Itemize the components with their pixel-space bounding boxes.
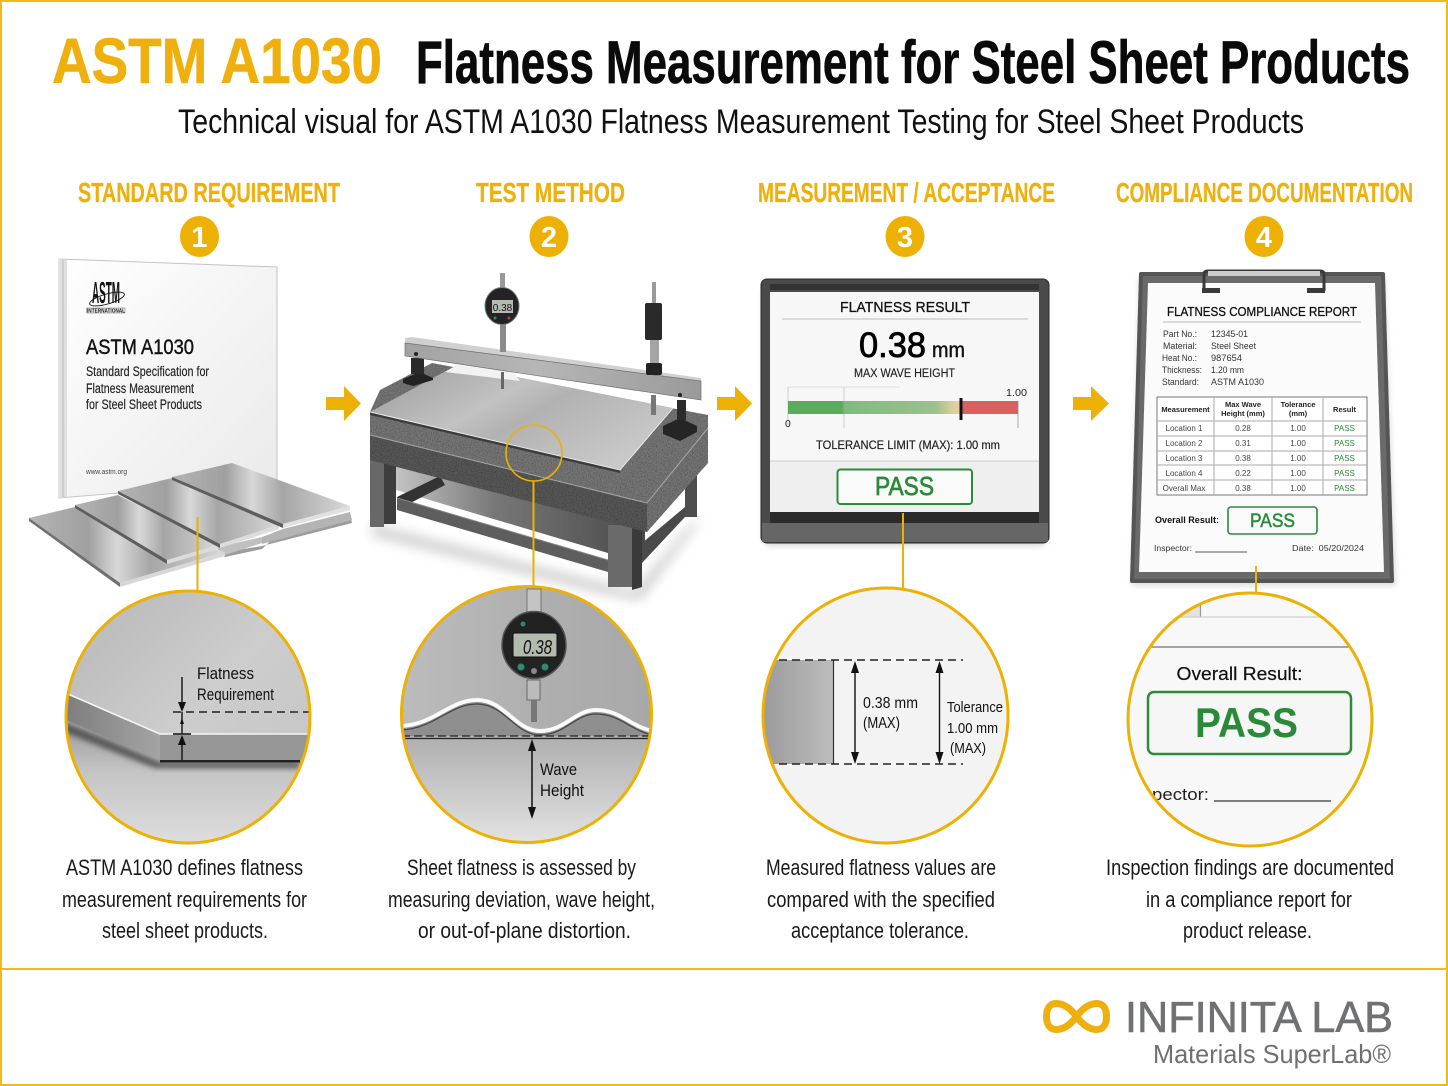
flatness result monitor: TOLERANCE LIMIT (MAX): 1.00 mm [816, 438, 1000, 452]
sheet 3 [118, 478, 279, 544]
step badge 4 [1244, 216, 1284, 257]
report table: 1.00 [1290, 454, 1306, 463]
detail circle 4: overall result [1120, 590, 1380, 850]
lower sheets [220, 514, 352, 557]
caption: step 3: acceptance tolerance. [791, 918, 969, 943]
report table: Height (mm) [1221, 409, 1265, 418]
caption: step 1 [62, 855, 307, 943]
dimension arrows [173, 677, 191, 760]
large pass stamp: PASS [1195, 699, 1298, 746]
compliance report clipboard: Date: 05/20/2024 [1292, 543, 1364, 553]
report table: Overall Max [1163, 484, 1205, 493]
arrow: step 1 to step 2 [326, 386, 361, 421]
report fields: Thickness: [1162, 365, 1202, 375]
tolerance gauge bar: 0 [785, 418, 791, 430]
sheet 4 [172, 463, 350, 524]
caption: step 4: product release. [1183, 918, 1312, 943]
report fields: 12345-01 [1211, 329, 1248, 339]
leader line: report to detail [1255, 566, 1257, 594]
detail circle 3: tolerance comparison: 0.38 mm [863, 695, 918, 712]
detail circle 2: wave height: Wave [540, 760, 577, 779]
report table: Max Wave [1225, 400, 1261, 409]
dashed reference line [173, 711, 310, 713]
right foot [663, 400, 697, 441]
caption: step 1: steel sheet products. [102, 918, 268, 943]
arrow: step 2 to step 3 [717, 386, 752, 421]
report table: Measurement [1161, 405, 1210, 414]
compliance report clipboard: Overall Result: [1155, 515, 1219, 526]
report fields: Part No.: [1163, 329, 1197, 339]
report fields: ASTM A1030 [1211, 377, 1264, 387]
report table: 1.00 [1290, 469, 1306, 478]
heading: test method: TEST METHOD [476, 177, 625, 208]
report table: 0.38 [1235, 484, 1251, 493]
standard document book: Standard Specification for [86, 364, 209, 379]
caption: step 3: Measured flatness values are [766, 855, 996, 880]
flatness result monitor [761, 279, 1049, 546]
standard document book [59, 259, 277, 498]
digital gauge [485, 273, 519, 389]
standard document book: ASTM A1030 [86, 336, 194, 359]
compliance report clipboard: FLATNESS COMPLIANCE REPORT [1167, 305, 1357, 319]
step badge 4: 4 [1256, 222, 1272, 254]
footer divider [0, 968, 1448, 970]
report table: PASS [1334, 439, 1355, 448]
caption: step 4 [1106, 855, 1394, 943]
tolerance gauge bar [785, 387, 1027, 430]
step badge 1: 1 [191, 222, 208, 254]
icon: infinity mark [1046, 1004, 1106, 1030]
caption: step 2 [388, 855, 655, 943]
sheet 1 [29, 507, 225, 583]
caption: step 2: measuring deviation, wave height, [388, 887, 655, 912]
report table: Result [1333, 405, 1356, 414]
caption: step 1: ASTM A1030 defines flatness [66, 855, 303, 880]
measured value: MAX WAVE HEIGHT [854, 368, 955, 380]
left foot [403, 358, 433, 386]
tolerance gauge bar: 1.00 [1006, 387, 1027, 399]
granite surface plate test setup [370, 273, 708, 600]
caption: step 1: measurement requirements for [62, 887, 307, 912]
report table [1157, 397, 1367, 495]
standard document book: for Steel Sheet Products [86, 397, 202, 412]
detail circle 4: overall result: Overall Result: [1176, 663, 1302, 684]
detail circle 4: overall result: pector: [1152, 785, 1209, 804]
report table: Tolerance [1281, 400, 1315, 409]
step badge 3 [886, 216, 924, 257]
tolerance arrow [936, 661, 944, 764]
detail circle 1: flatness requirement [60, 585, 316, 850]
flatness result monitor: FLATNESS RESULT [840, 300, 970, 316]
measured value: 0.38 [859, 326, 926, 365]
report fields: Steel Sheet [1211, 341, 1256, 351]
detail circle 2: wave height [400, 585, 656, 845]
report table: 0.31 [1235, 439, 1251, 448]
detail circle 3: tolerance comparison: Tolerance [947, 699, 1003, 716]
footer logo: INFINITA LAB [1125, 993, 1393, 1042]
report fields: 1.20 mm [1211, 365, 1244, 375]
caption: step 3 [766, 855, 996, 943]
icon: ASTM logo [86, 277, 126, 314]
compliance report clipboard [1132, 271, 1396, 586]
report table: 1.00 [1290, 484, 1306, 493]
report fields: Standard: [1162, 377, 1199, 387]
detail circle 2: wave height: Height [540, 781, 584, 800]
report fields [1162, 329, 1264, 387]
step badge 3: 3 [897, 222, 913, 254]
caption: step 4: in a compliance report for [1146, 887, 1352, 912]
report table: PASS [1334, 424, 1355, 433]
report table: Location 4 [1166, 469, 1203, 478]
caption: step 4: Inspection findings are documented [1106, 855, 1394, 880]
compliance report clipboard: Inspector: [1154, 543, 1192, 553]
highlight ring on plate [506, 425, 562, 481]
heading: measurement / acceptance: MEASUREMENT / ACCEPTANCE [758, 177, 1055, 208]
title: ASTM A1030 [52, 25, 382, 97]
report table: 1.00 [1290, 439, 1306, 448]
heading: standard requirement: STANDARD REQUIREMENT [78, 177, 340, 208]
leader line: plate to detail [532, 481, 534, 590]
report fields: Material: [1163, 341, 1197, 351]
measured arrow [851, 661, 859, 764]
arrow: step 3 to step 4 [1073, 386, 1109, 421]
report table: PASS [1334, 469, 1355, 478]
report table: 0.28 [1235, 424, 1251, 433]
right gauge [645, 282, 662, 415]
detail circle 1: flatness requirement: Flatness [197, 665, 254, 683]
leader line: sheet to detail [196, 517, 198, 592]
large pass stamp [1148, 692, 1351, 754]
icon: ASTM logo: INTERNATIONAL [87, 308, 125, 314]
report table: Location 3 [1166, 454, 1203, 463]
wave height arrow [528, 739, 536, 819]
report table: Location 1 [1166, 424, 1203, 433]
granite plate [370, 363, 708, 503]
leader line: monitor to detail [902, 513, 904, 590]
detail circle 1: flatness requirement: Requirement [197, 686, 274, 704]
footer logo [1046, 993, 1393, 1069]
report table: Location 2 [1166, 439, 1203, 448]
sheet 2 [75, 495, 218, 560]
standard document book: www.astm.org [85, 467, 127, 476]
steel sheet samples [29, 463, 352, 587]
step badge 2: 2 [541, 222, 557, 254]
pass stamp [838, 470, 972, 504]
title [52, 25, 1410, 97]
metal clip [1202, 271, 1325, 293]
footer logo: Materials SuperLab® [1153, 1039, 1391, 1069]
report fields: 987654 [1211, 353, 1242, 363]
step badge 2 [530, 216, 568, 257]
measured value [854, 326, 965, 380]
report table: 0.22 [1235, 469, 1251, 478]
dial indicator [502, 589, 566, 722]
caption: step 3: compared with the specified [767, 887, 995, 912]
straightedge bar [405, 337, 701, 400]
caption: step 2: or out-of-plane distortion. [418, 918, 631, 943]
report pass stamp [1228, 507, 1317, 534]
report fields: Heat No.: [1162, 353, 1197, 363]
table stand [370, 458, 697, 590]
detail circle 3: tolerance comparison: (MAX) [950, 740, 986, 757]
caption: step 2: Sheet flatness is assessed by [407, 855, 636, 880]
detail circle 3: tolerance comparison [760, 585, 1012, 847]
report table: 1.00 [1290, 424, 1306, 433]
pass stamp: PASS [875, 471, 934, 501]
step badge 1 [180, 216, 219, 257]
icon: ASTM logo: ASTM [92, 277, 120, 311]
detail circle 3: tolerance comparison: (MAX) [863, 715, 900, 732]
digital gauge: 0.38 [493, 303, 513, 314]
detail circle 3: tolerance comparison: 1.00 mm [947, 720, 998, 737]
report table: 0.38 [1235, 454, 1251, 463]
report table: PASS [1334, 454, 1355, 463]
test sheet on plate [370, 412, 620, 473]
report pass stamp: PASS [1250, 511, 1295, 532]
dial indicator: 0.38 [523, 637, 552, 659]
report table: PASS [1334, 484, 1355, 493]
measured value: mm [932, 339, 965, 362]
report table: (mm) [1289, 409, 1308, 418]
standard document book: Flatness Measurement [86, 381, 194, 396]
